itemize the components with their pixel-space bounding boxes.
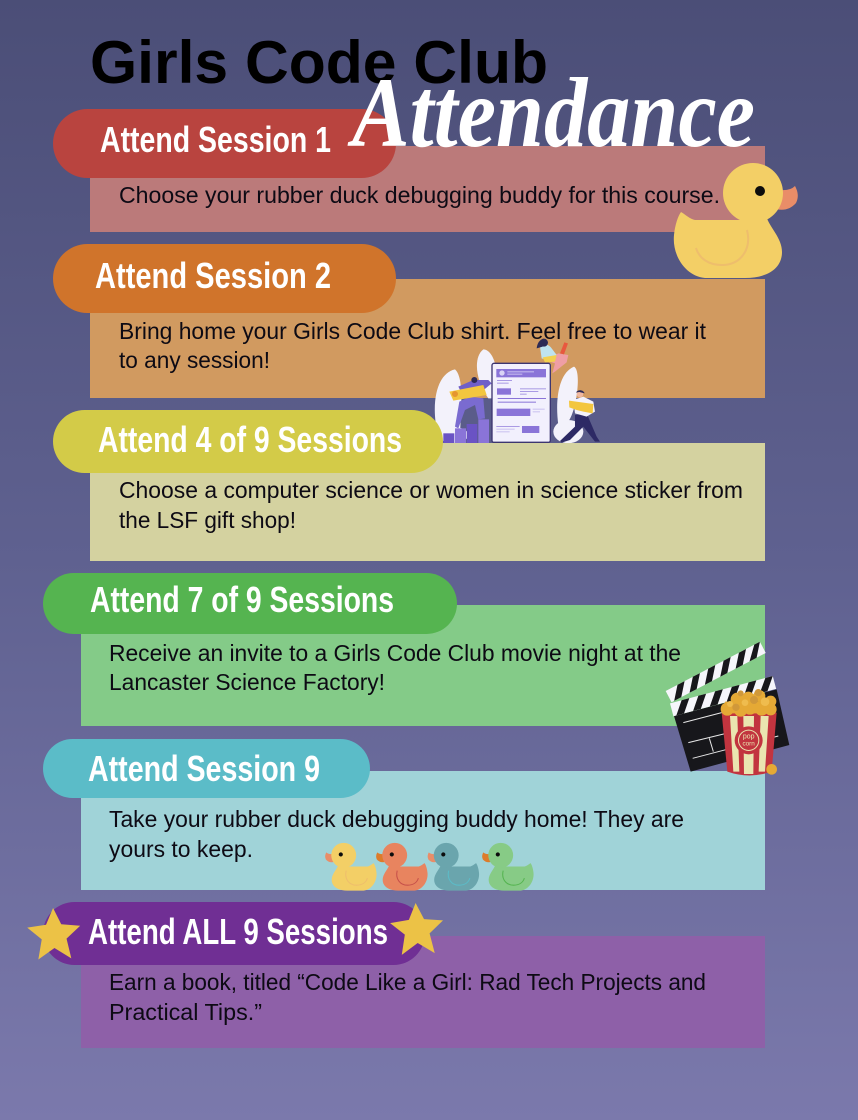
- heading pill: Attend Session 9: [43, 739, 370, 798]
- heading pill: Attend 7 of 9 Sessions: [43, 573, 457, 634]
- panel: session 2 description: Bring home your Girls Code Club shirt. Feel free to wear it: [119, 318, 707, 344]
- heading pill: Attend ALL 9 Sessions: Attend ALL 9 Sessions: [88, 911, 388, 952]
- heading pill: Attend 4 of 9 Sessions: [53, 410, 443, 473]
- panel: 4 of 9 sessions description: the LSF gift shop!: [119, 507, 296, 533]
- panel: session 1 description: Choose your rubber duck debugging buddy for this course.: [119, 182, 720, 208]
- title: Attendance script: Attendance: [347, 57, 755, 168]
- panel: 7 of 9 sessions description: Receive an invite to a Girls Code Club movie night at the: [109, 640, 681, 666]
- panel: 4 of 9 sessions description: Choose a computer science or women in science sticker from: [119, 477, 743, 503]
- panel: session 9 description: [81, 771, 765, 890]
- panel: session 2 description: [90, 279, 765, 398]
- illustration: people with report and charts: [435, 339, 600, 443]
- icon: teal duck: [428, 843, 479, 891]
- heading pill: Attend Session 1: Attend Session 1: [100, 119, 331, 160]
- panel: session 2 description: to any session!: [119, 347, 270, 373]
- heading pill: Attend Session 2: [53, 244, 396, 313]
- icon: yellow duck: [325, 843, 377, 891]
- panel: 4 of 9 sessions description: [90, 443, 765, 561]
- heading pill: Attend ALL 9 Sessions: [43, 902, 425, 965]
- icon: clapperboard and popcorn: [666, 642, 789, 775]
- panel: session 9 description: yours to keep.: [109, 836, 253, 862]
- heading pill: Attend Session 1: [53, 109, 396, 178]
- icon: orange duck: [376, 843, 428, 891]
- panel: session 9 description: Take your rubber duck debugging buddy home! They are: [109, 806, 684, 832]
- panel: all 9 sessions description: Practical Tips.”: [109, 999, 262, 1025]
- panel: session 1 description: [90, 146, 765, 232]
- panel: 7 of 9 sessions description: Lancaster Science Factory!: [109, 669, 385, 695]
- icon: green duck: [482, 843, 534, 891]
- icon: right star: [389, 902, 445, 955]
- panel: all 9 sessions description: [81, 936, 765, 1048]
- panel: 7 of 9 sessions description: [81, 605, 765, 726]
- icon: rubber duck buddy: [674, 163, 798, 278]
- panel: all 9 sessions description: Earn a book, titled “Code Like a Girl: Rad Tech Projects and: [109, 969, 706, 995]
- heading pill: Attend 4 of 9 Sessions: Attend 4 of 9 Sessions: [98, 419, 402, 460]
- icon: clapperboard and popcorn: pop: [743, 734, 755, 741]
- title: Girls Code Club: Girls Code Club: [90, 29, 548, 96]
- heading pill: Attend Session 9: Attend Session 9: [88, 748, 320, 789]
- icon: left star: [27, 907, 81, 960]
- heading pill: Attend 7 of 9 Sessions: Attend 7 of 9 Sessions: [90, 579, 394, 620]
- heading pill: Attend Session 2: Attend Session 2: [95, 255, 331, 296]
- icon: clapperboard and popcorn: corn: [743, 740, 755, 747]
